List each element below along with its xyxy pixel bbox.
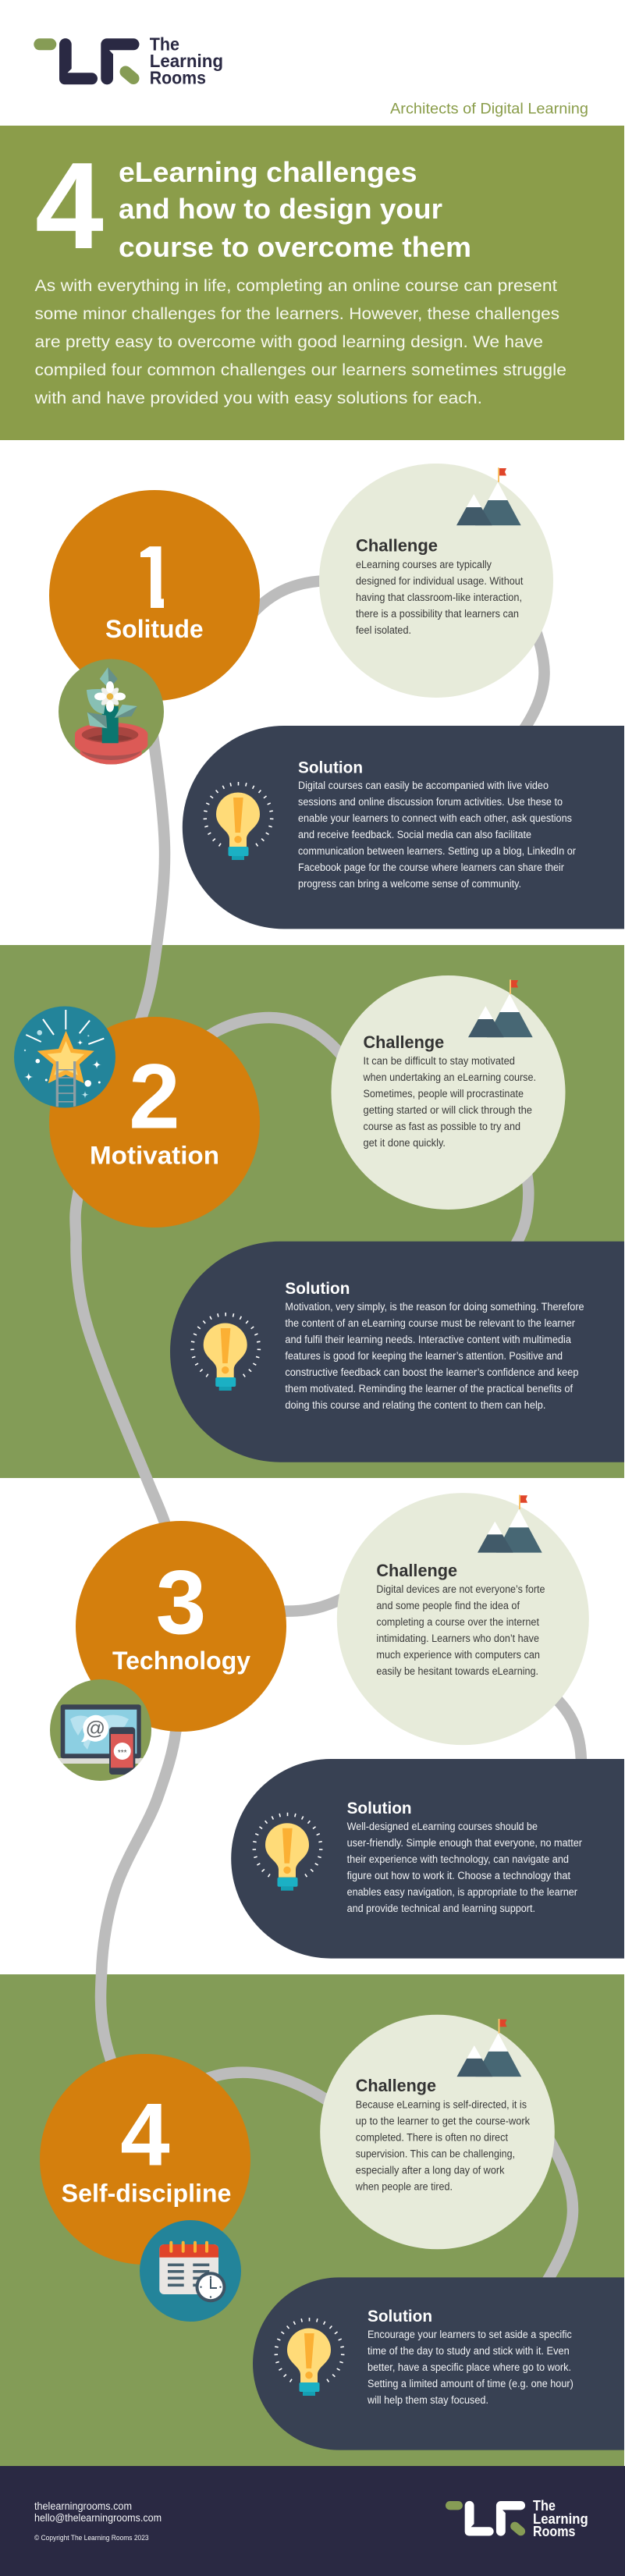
solution text <box>298 780 576 890</box>
solution panel <box>170 1242 624 1462</box>
hero title <box>119 156 471 263</box>
challenge text: and some people find the idea of <box>376 1600 520 1611</box>
section 2: motivation <box>14 975 624 1462</box>
icon: mountains with flag <box>456 467 521 525</box>
challenge panel <box>319 464 553 698</box>
challenge text: intimidating. Learners who don’t have <box>376 1633 539 1644</box>
orange circle with number and title: 4 <box>120 2085 170 2184</box>
icon: laptop and phone <box>47 1679 156 1781</box>
solution text: user-friendly. Simple enough that everyone, no matter <box>347 1837 582 1849</box>
challenge text: course as fast as possible to try and <box>364 1121 520 1132</box>
hero intro text: some minor challenges for the learners. However, these challenges <box>34 305 559 323</box>
footer contact text <box>34 2500 162 2542</box>
solution text: Well-designed eLearning courses should be <box>347 1821 538 1832</box>
solution text: Digital courses can easily be accompanied with live video <box>298 780 549 791</box>
footer contact text: hello@thelearningrooms.com <box>34 2512 162 2524</box>
solution text: communication between learners. Setting up a blog, LinkedIn or <box>298 845 576 857</box>
solution text: and receive feedback. Social media can also facilitate <box>298 829 531 840</box>
challenge text: eLearning courses are typically <box>356 559 492 570</box>
hero title: and how to design your <box>119 193 442 225</box>
icon: light bulb <box>253 1813 322 1891</box>
orange circle with number and title <box>49 490 260 701</box>
orange circle with number and title: Solitude <box>105 615 204 643</box>
footer contact text: thelearningrooms.com <box>34 2500 132 2512</box>
icon: mountains with flag <box>468 979 533 1037</box>
solution panel <box>231 1759 624 1959</box>
solution text: will help them stay focused. <box>367 2394 488 2406</box>
icon: mountains with flag <box>457 2019 521 2077</box>
section 4: self-discipline <box>40 2015 624 2450</box>
solution text: time of the day to study and stick with it. Even <box>368 2345 570 2357</box>
solution text: Encourage your learners to set aside a specific <box>368 2329 572 2340</box>
orange circle with number and title <box>49 1017 260 1228</box>
orange circle with number and title: Motivation <box>90 1142 219 1170</box>
challenge heading: Challenge <box>356 2076 436 2095</box>
challenge text: easily be hesitant towards eLearning. <box>376 1665 538 1677</box>
icon: star and ladder <box>14 1007 115 1108</box>
solution text: Setting a limited amount of time (e.g. one hour) <box>368 2378 574 2389</box>
green band: section 2 background <box>0 945 624 1478</box>
challenge text: having that classroom-like interaction, <box>356 592 522 603</box>
challenge text: feel isolated. <box>356 624 411 636</box>
challenge text: when people are tired. <box>355 2181 453 2193</box>
solution text: and fulfil their learning needs. Interactive content with multimedia <box>285 1334 571 1345</box>
hero title: eLearning challenges <box>119 156 417 188</box>
solution text <box>347 1821 582 1914</box>
challenge text <box>356 559 524 636</box>
solution text: them motivated. Reminding the learner of the practical benefits of <box>285 1383 573 1395</box>
footer logo: The <box>533 2498 556 2514</box>
hero intro text: are pretty easy to overcome with good learning design. We have <box>34 333 543 351</box>
solution text: enables easy navigation, is appropriate to the learner <box>347 1886 577 1898</box>
hero intro text: As with everything in life, completing an online course can present <box>34 277 557 295</box>
challenge text <box>363 1055 536 1149</box>
challenge text: getting started or will click through the <box>364 1104 532 1116</box>
solution text: the content of an eLearning course must be relevant to the learner <box>285 1317 575 1329</box>
challenge text: there is a possibility that learners can <box>356 608 519 620</box>
solution panel <box>253 2277 624 2450</box>
icon: flower in pot <box>59 659 164 766</box>
solution text: and provide technical and learning support. <box>347 1903 535 1914</box>
solution text: Motivation, very simply, is the reason for doing something. Therefore <box>285 1301 584 1313</box>
orange circle with number and title: Self-discipline <box>62 2179 231 2207</box>
icon: mountains with flag <box>478 1495 542 1553</box>
challenge panel <box>337 1493 589 1745</box>
section 1: solitude <box>49 464 624 929</box>
challenge heading: Challenge <box>356 536 438 556</box>
solution text: their experience with technology, can navigate and <box>347 1853 569 1865</box>
challenge text: completing a course over the internet <box>376 1616 539 1628</box>
orange circle with number and title: 2 <box>129 1046 180 1149</box>
orange circle with number and title: 3 <box>156 1551 206 1653</box>
footer logo: Learning <box>533 2511 588 2527</box>
orange circle with number and title <box>40 2054 250 2265</box>
solution heading: Solution <box>298 759 363 776</box>
solution text: progress can bring a welcome sense of community. <box>298 878 521 890</box>
header logo: The <box>150 34 179 54</box>
hero intro text: with and have provided you with easy solutions for each. <box>34 389 482 407</box>
icon: light bulb <box>190 1313 261 1391</box>
challenge text: up to the learner to get the course-work <box>356 2116 530 2127</box>
icon: light bulb <box>204 782 273 860</box>
solution text: better, have a specific place where go to work. <box>368 2361 571 2373</box>
icon: laptop and phone: *** <box>118 1749 127 1757</box>
solution heading: Solution <box>368 2308 432 2326</box>
orange circle with number and title <box>76 1521 286 1732</box>
header logo: Rooms <box>150 68 206 88</box>
footer background <box>0 2466 625 2576</box>
hero intro text: compiled four common challenges our learners sometimes struggle <box>34 361 566 379</box>
solution text: features is good for keeping the learner’s attention. Positive and <box>285 1350 563 1362</box>
challenge heading: Challenge <box>376 1561 457 1580</box>
section 3: technology <box>47 1493 624 1959</box>
solution text: enable your learners to connect with each other, ask questions <box>298 812 572 824</box>
challenge panel <box>331 975 565 1210</box>
solution text <box>367 2329 574 2406</box>
hero big number: 4 <box>35 137 104 275</box>
hero title: course to overcome them <box>119 231 471 263</box>
icon: calendar and clock <box>140 2220 241 2322</box>
challenge text: get it done quickly. <box>364 1137 446 1149</box>
tagline: Architects of Digital Learning <box>390 101 588 117</box>
challenge text: It can be difficult to stay motivated <box>364 1055 515 1067</box>
solution text: Facebook page for the course where learners can share their <box>298 862 564 873</box>
solution text: sessions and online discussion forum activities. Use these to <box>298 796 563 808</box>
header logo <box>34 34 223 88</box>
challenge text: designed for individual usage. Without <box>356 575 524 587</box>
footer contact text: © Copyright The Learning Rooms 2023 <box>34 2534 149 2542</box>
solution heading: Solution <box>347 1800 412 1817</box>
icon: light bulb <box>275 2318 344 2396</box>
challenge text <box>376 1583 545 1677</box>
challenge text <box>355 2099 530 2193</box>
challenge text: completed. There is often no direct <box>356 2132 508 2144</box>
green band: section 4 background <box>0 1974 624 2466</box>
solution panel <box>183 726 624 929</box>
hero panel <box>0 126 624 440</box>
solution text: doing this course and relating the content to them can help. <box>285 1399 545 1411</box>
orange circle with number and title: 1 <box>128 528 178 627</box>
solution text: constructive feedback can boost the learner’s confidence and keep <box>285 1366 578 1378</box>
solution text: figure out how to work it. Choose a technology that <box>347 1870 570 1881</box>
challenge text: supervision. This can be challenging, <box>356 2148 515 2160</box>
footer logo <box>446 2498 588 2539</box>
challenge heading: Challenge <box>364 1032 444 1052</box>
icon: laptop and phone: @ <box>86 1718 105 1739</box>
challenge text: when undertaking an eLearning course. <box>363 1071 536 1083</box>
footer logo: Rooms <box>533 2524 576 2539</box>
challenge text: Because eLearning is self-directed, it is <box>356 2099 527 2111</box>
challenge text: especially after a long day of work <box>356 2165 505 2176</box>
challenge panel <box>320 2015 555 2249</box>
challenge text: much experience with computers can <box>376 1649 540 1661</box>
header logo: Learning <box>150 51 223 71</box>
solution heading: Solution <box>285 1280 350 1298</box>
hero intro text <box>34 277 566 407</box>
solution text <box>285 1301 584 1411</box>
challenge text: Digital devices are not everyone’s forte <box>376 1583 545 1595</box>
challenge text: Sometimes, people will procrastinate <box>364 1088 524 1100</box>
winding connector path <box>75 581 581 2283</box>
orange circle with number and title: Technology <box>112 1647 250 1675</box>
